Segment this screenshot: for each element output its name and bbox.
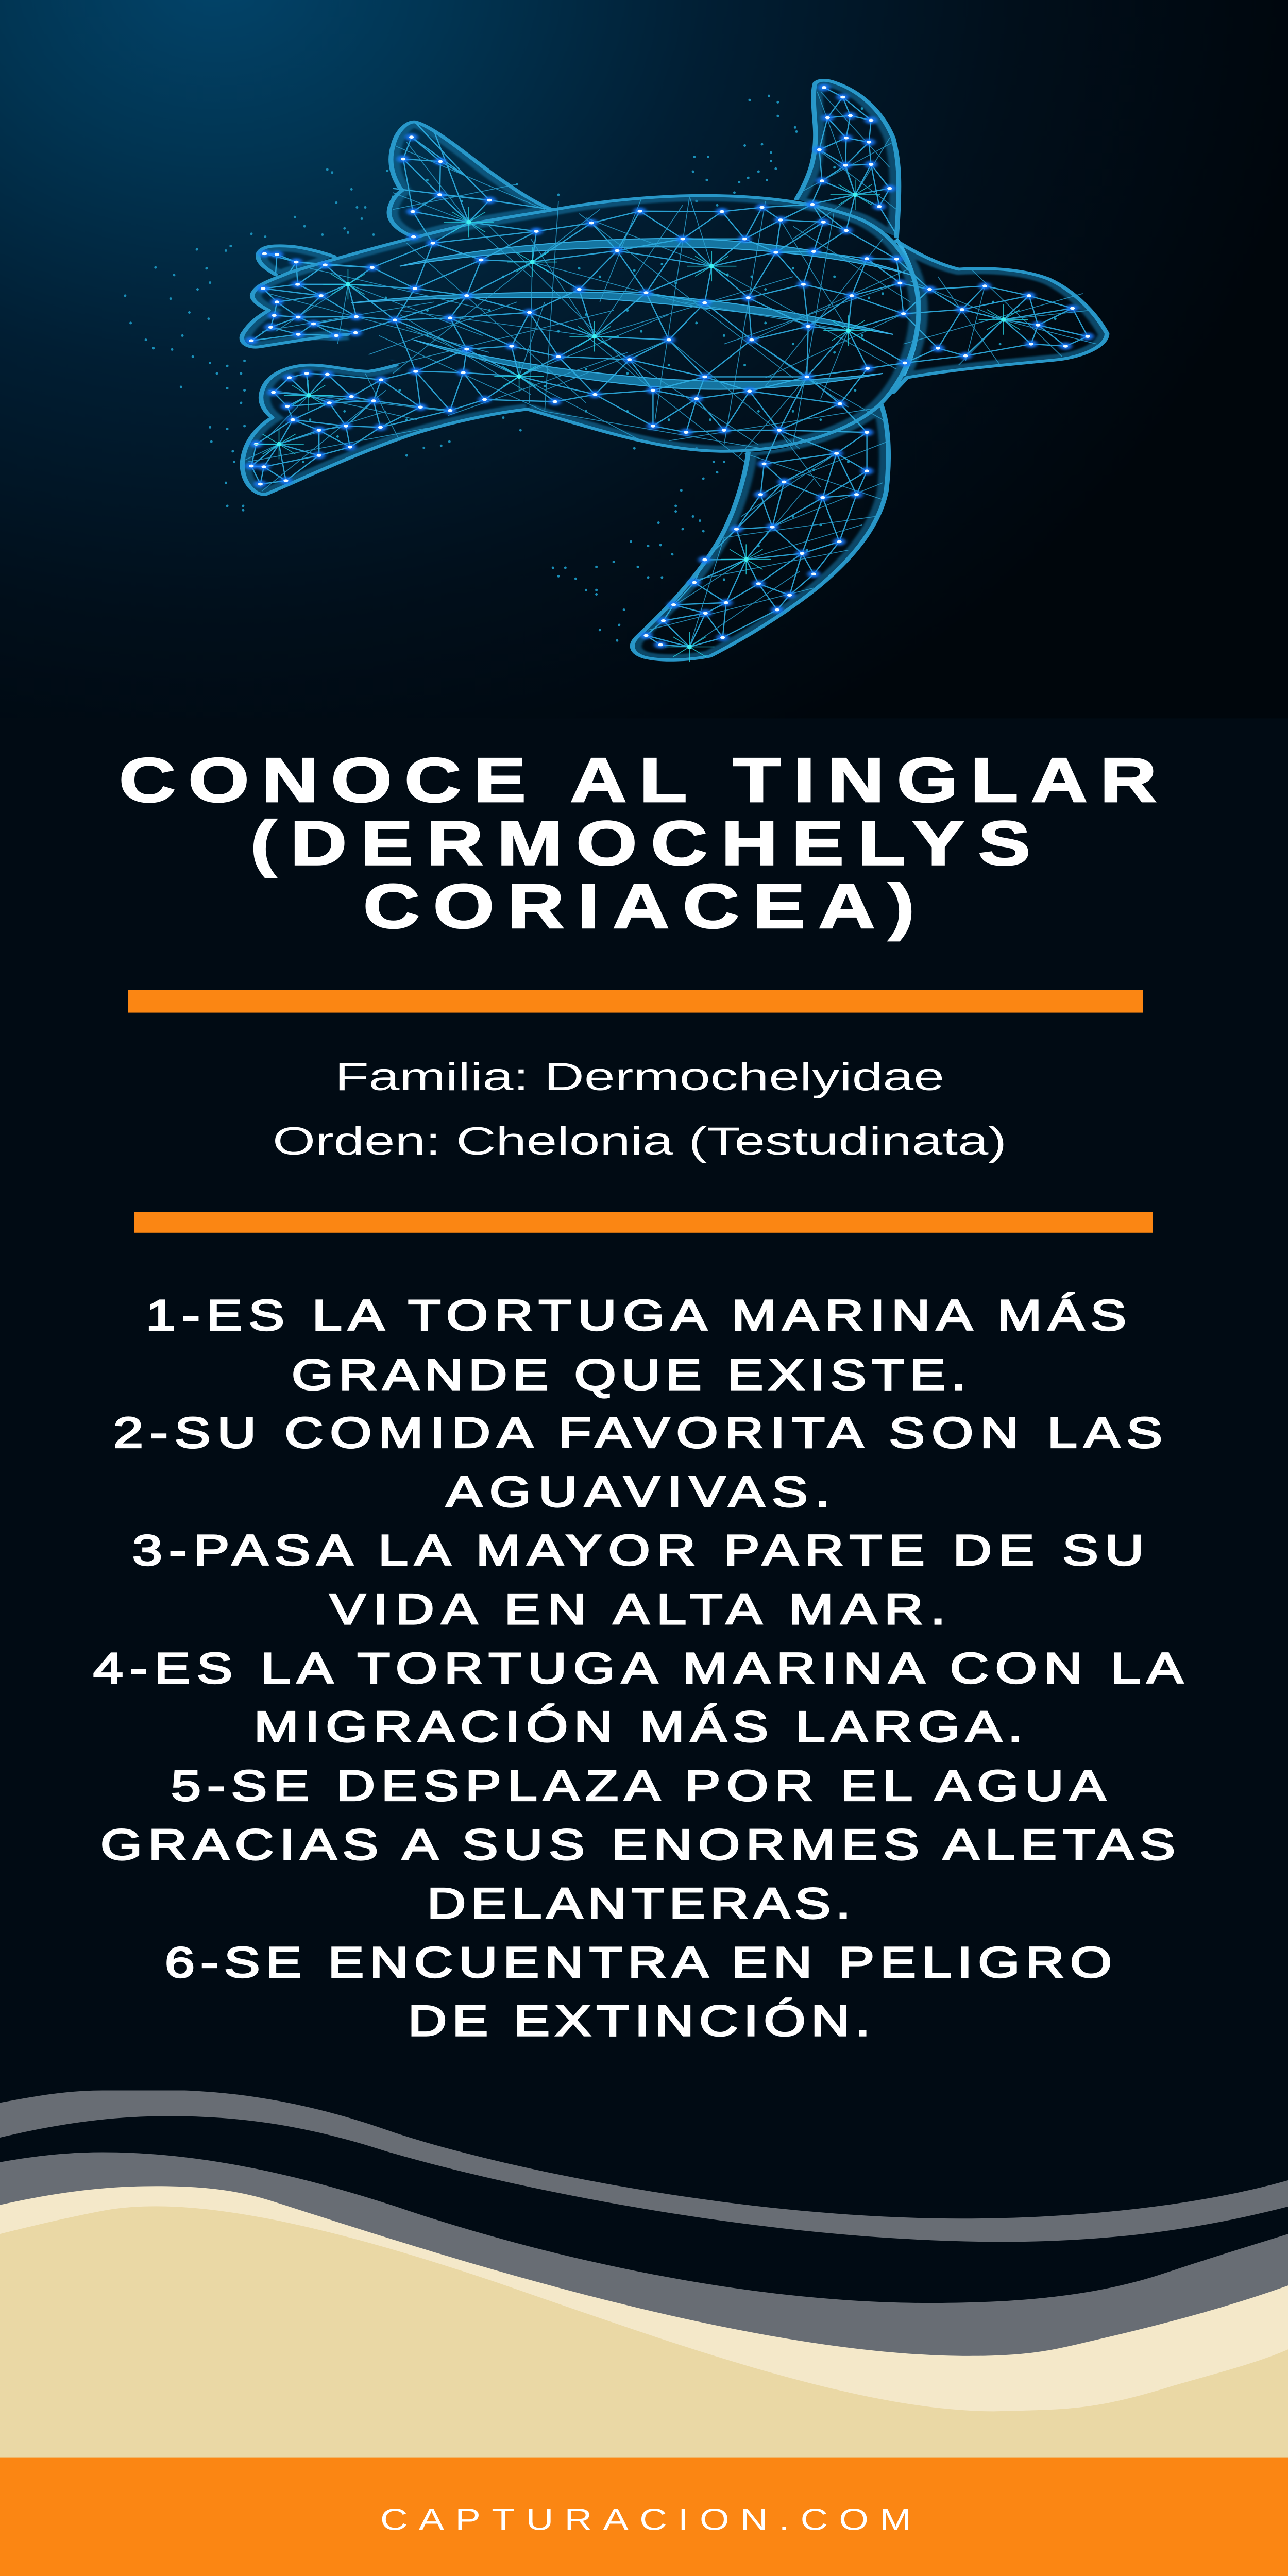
facts list: GRANDE QUE EXISTE. bbox=[292, 1351, 966, 1398]
divider bar bottom bbox=[134, 1212, 1153, 1233]
facts list: GRACIAS A SUS ENORMES ALETAS bbox=[100, 1821, 1175, 1868]
interior particles bbox=[303, 109, 1055, 580]
divider bar top bbox=[128, 990, 1143, 1013]
title: CORIACEA) bbox=[363, 871, 914, 941]
taxonomy text: Familia: Dermochelyidae bbox=[335, 1055, 944, 1099]
facts list: 1-ES LA TORTUGA MARINA MÁS bbox=[146, 1292, 1126, 1339]
title: CONOCE AL TINGLAR bbox=[119, 745, 1157, 816]
wave: lower gray band bbox=[0, 2153, 1288, 2382]
illustration: polygonal leatherback turtle bbox=[125, 80, 1107, 662]
title: (DERMOCHELYS bbox=[250, 808, 1030, 878]
inner edge shading bbox=[242, 80, 1107, 660]
node cores bbox=[251, 88, 1088, 645]
waves and sand bbox=[0, 2091, 1288, 2458]
taxonomy text bbox=[273, 1055, 1007, 1163]
node glow bbox=[251, 88, 1088, 645]
taxonomy text: Orden: Chelonia (Testudinata) bbox=[273, 1120, 1007, 1163]
facts list: 5-SE DESPLAZA POR EL AGUA bbox=[171, 1761, 1106, 1809]
cyan star nodes bbox=[254, 180, 1028, 662]
facts list bbox=[93, 1292, 1183, 2045]
footer text: CAPTURACION.COM bbox=[380, 2502, 911, 2537]
facts list: DELANTERAS. bbox=[427, 1879, 851, 1927]
footer bar bbox=[0, 2458, 1288, 2576]
facts list: AGUAVIVAS. bbox=[446, 1468, 830, 1516]
facts list: 6-SE ENCUENTRA EN PELIGRO bbox=[165, 1939, 1112, 1986]
facts list: 2-SU COMIDA FAVORITA SON LAS bbox=[113, 1409, 1162, 1456]
title bbox=[119, 745, 1157, 941]
shell ridges bbox=[351, 239, 919, 389]
facts list: DE EXTINCIÓN. bbox=[408, 1997, 870, 2045]
panel: hero image background with blue gradient bbox=[0, 0, 1288, 718]
facts list: 4-ES LA TORTUGA MARINA CON LA bbox=[93, 1644, 1183, 1692]
facts list: 3-PASA LA MAYOR PARTE DE SU bbox=[132, 1527, 1144, 1574]
mesh lines bbox=[251, 88, 1088, 647]
long thin mesh lines bbox=[241, 92, 1097, 647]
silhouette outline bbox=[242, 80, 1107, 660]
facts list: VIDA EN ALTA MAR. bbox=[330, 1585, 945, 1633]
wave: cream foam bbox=[0, 2186, 1288, 2416]
facts list: MIGRACIÓN MÁS LARGA. bbox=[254, 1703, 1023, 1751]
particles around the turtle bbox=[125, 96, 796, 640]
sand bbox=[0, 2206, 1288, 2458]
wave: upper gray band bbox=[0, 2091, 1288, 2242]
